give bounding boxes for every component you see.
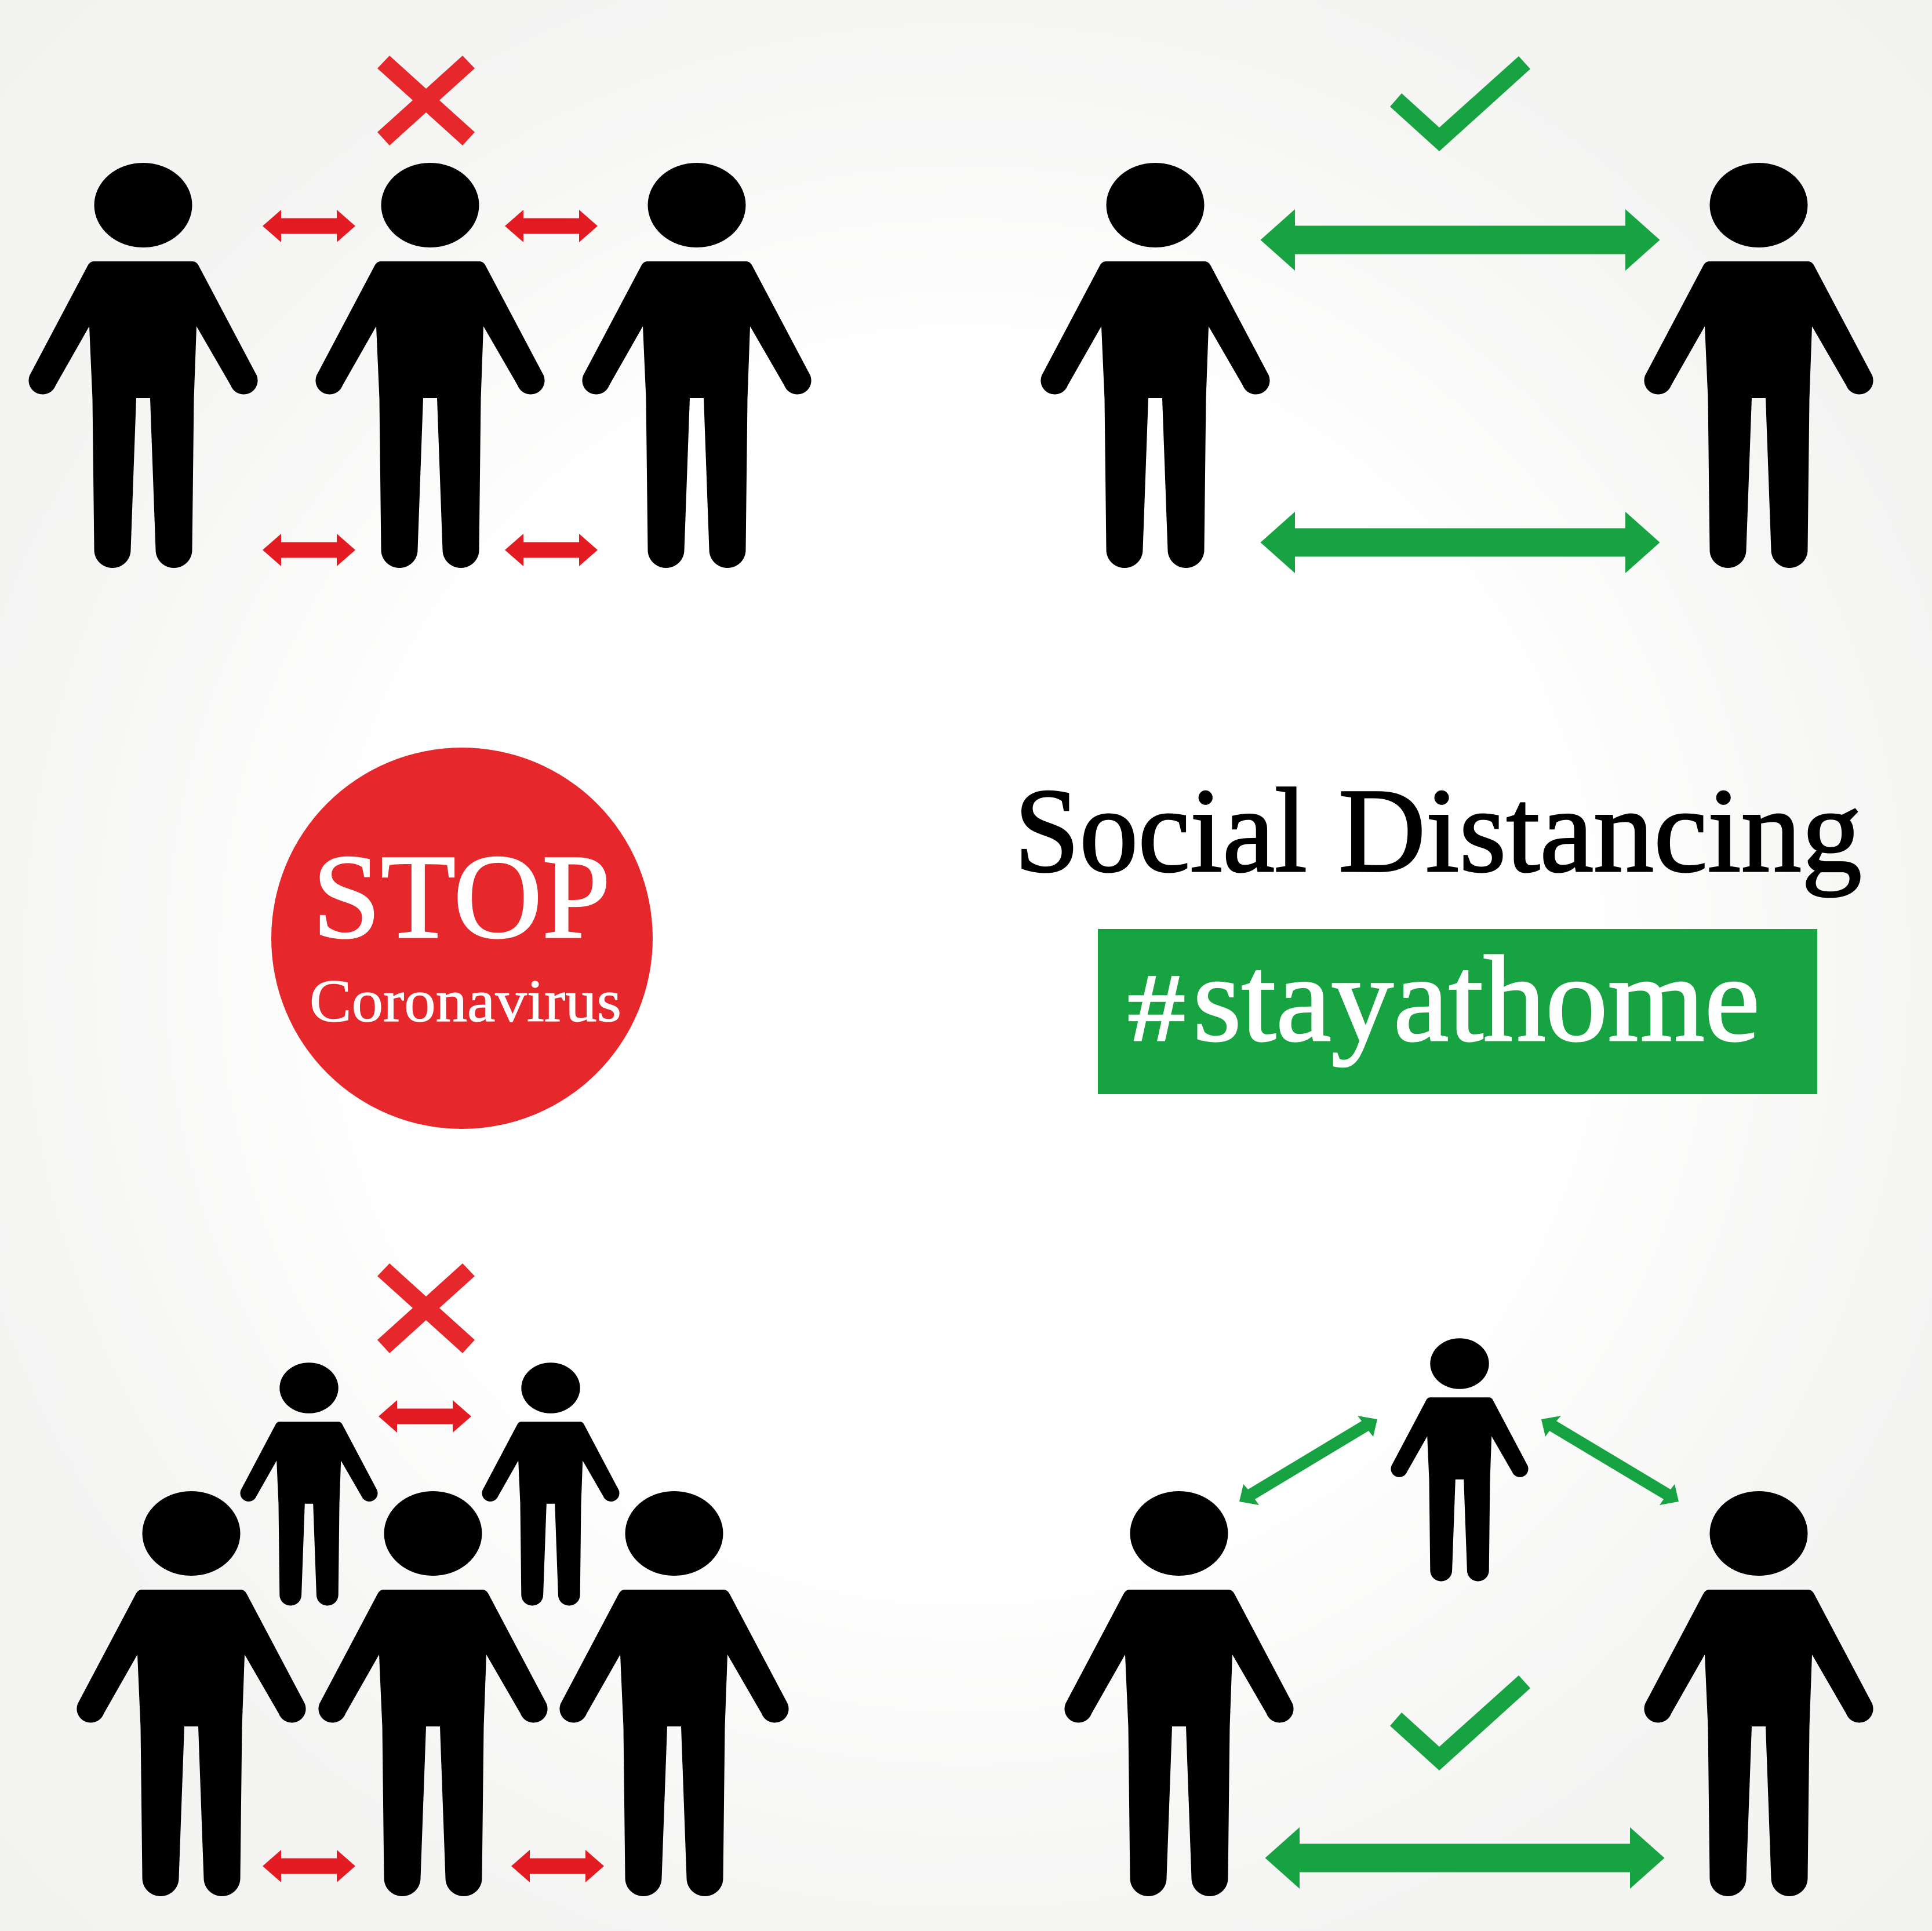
text: STOP: STOP [312, 830, 610, 963]
arrow: diagonal left [1239, 1416, 1377, 1505]
panel: safe distance, two people [1040, 56, 1873, 573]
person front right [559, 1491, 789, 1896]
arrow: diagonal right [1541, 1416, 1679, 1505]
person right [1644, 163, 1873, 568]
person middle [315, 163, 545, 568]
panel: safe distance, three people [1064, 1338, 1873, 1896]
person right [582, 163, 812, 568]
arrow: back row short distance [379, 1400, 471, 1433]
icon: green check [1390, 56, 1530, 151]
icon: red cross [377, 1263, 475, 1353]
person back right [482, 1362, 620, 1606]
green rectangle [1098, 929, 1817, 1094]
panel: too close, group of five [77, 1263, 789, 1896]
panel: stay at home banner [1098, 929, 1817, 1094]
person front right [1644, 1491, 1873, 1896]
person front left [77, 1491, 306, 1896]
heading: Social Distancing [1014, 764, 1862, 897]
person front left [1064, 1491, 1294, 1896]
arrow: bottom left short distance [263, 534, 355, 566]
person left [1040, 163, 1270, 568]
panel: stop coronavirus badge [271, 748, 653, 1129]
arrow: top right short distance [505, 210, 598, 242]
arrow: top long distance [1260, 209, 1660, 271]
heading: Social Distancing: Distancing [1338, 764, 1862, 897]
icon: green check [1390, 1675, 1530, 1770]
heading: Social Distancing: Social [1014, 764, 1307, 897]
person left [28, 163, 258, 568]
arrow: top left short distance [263, 210, 355, 242]
person front middle [318, 1491, 548, 1896]
person back centre [1391, 1338, 1529, 1582]
arrow: front left short distance [263, 1850, 355, 1882]
red circle [271, 748, 653, 1129]
person back left [240, 1362, 378, 1606]
arrow: front right short distance [511, 1850, 604, 1882]
arrow: long distance [1265, 1827, 1665, 1889]
text: Coronavirus: Coronavirus [310, 968, 621, 1034]
text: #stayathome: stayathome [1193, 931, 1760, 1067]
arrow: bottom right short distance [505, 534, 598, 566]
panel: too close, three people in a row [28, 56, 812, 568]
icon: red cross [377, 56, 475, 145]
text: #stayathome: # [1127, 954, 1185, 1062]
arrow: bottom long distance [1260, 512, 1660, 573]
